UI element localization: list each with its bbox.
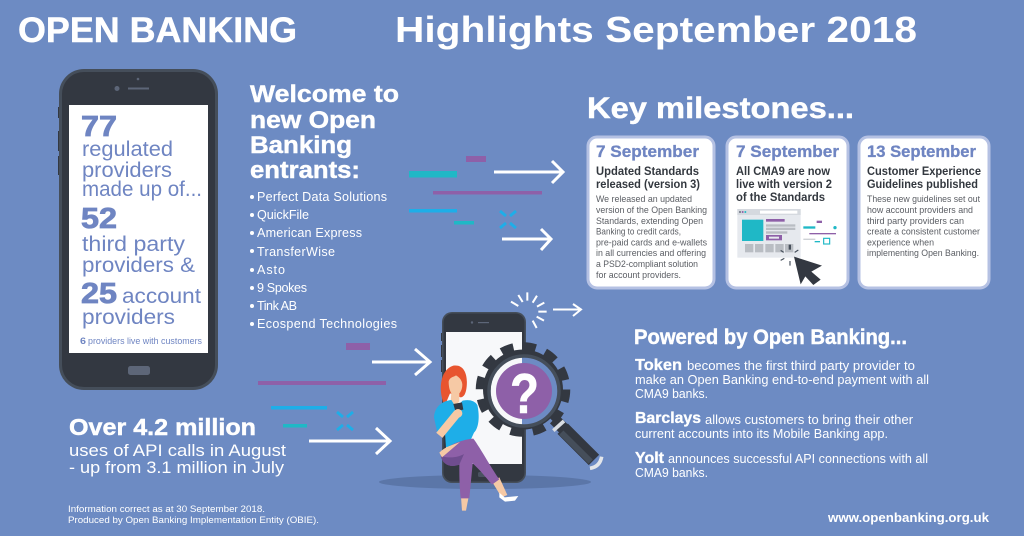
icon: browser window and cursor <box>737 209 837 285</box>
heading: key milestones: Key milestones... <box>587 92 854 125</box>
panel: card 13 September guidelines <box>859 137 989 288</box>
panel: phone with provider statistics: providers <box>82 158 172 182</box>
panel: card 7 September updated standards: released (version 3) <box>596 179 700 191</box>
panel: card 13 September guidelines: 13 September <box>867 142 976 161</box>
panel: phone with provider statistics: third party <box>82 232 185 256</box>
panel: phone with provider statistics: providers live with customers <box>88 336 202 347</box>
heading: new entrants: Welcome to <box>250 81 399 108</box>
text block: Token: becomes the first third party provider to <box>687 358 915 373</box>
arrow: to key milestones upper <box>494 161 563 183</box>
panel: card 7 September updated standards: Updated Standards <box>596 166 699 178</box>
panel: card 13 September guidelines: create a consistent customer <box>867 226 980 236</box>
heading: new entrants: Banking <box>250 132 352 159</box>
panel: card 7 September updated standards: version of the Open Banking <box>596 205 707 215</box>
footer: source note: Information correct as at 30 September 2018. <box>68 504 265 514</box>
heading: new entrants: new Open <box>250 107 376 134</box>
text block: Token: make an Open Banking end-to-end payment with all <box>635 372 929 387</box>
icon: burst rays <box>511 292 547 328</box>
list: new entrants: TransferWise <box>257 245 335 259</box>
panel: card 13 September guidelines: Customer Experience <box>867 166 981 178</box>
panel: card 7 September updated standards <box>588 137 714 288</box>
list: new entrants: 9 Spokes <box>257 281 307 295</box>
panel: card 13 September guidelines: Guidelines published <box>867 179 978 191</box>
text block: Token: CMA9 banks. <box>635 386 708 401</box>
icon: gear and magnifying glass with question mark: ? <box>510 362 539 426</box>
text block: Barclays: current accounts into its Mobile Banking app. <box>635 426 888 441</box>
text block: Barclays: Barclays <box>635 410 701 427</box>
heading: new entrants <box>250 81 399 184</box>
panel: phone with provider statistics: 52 <box>81 203 117 235</box>
stat: API calls: uses of API calls in August <box>69 442 286 460</box>
panel: card 7 September updated standards: Banking to credit cards, <box>596 226 681 236</box>
list: new entrants: Asto <box>257 263 285 277</box>
text block: Token: Token <box>635 357 682 374</box>
arrow: to key milestones lower <box>502 229 551 250</box>
illustration: phone, magnifier and woman <box>379 292 602 511</box>
text block: Barclays <box>635 410 914 441</box>
text block: Yolt <box>635 450 928 480</box>
text block: Yolt: Yolt <box>635 450 664 467</box>
panel: phone with provider statistics: providers & <box>82 253 195 277</box>
panel: card 7 September CMA9 live: of the Standards <box>736 192 825 204</box>
footer: source note: Produced by Open Banking Implementation Entity (OBIE). <box>68 515 319 525</box>
panel: card 7 September CMA9 live <box>727 137 848 288</box>
panel: card 13 September guidelines: how account providers and <box>867 205 973 215</box>
panel: card 13 September guidelines: implementing Open Banking. <box>867 248 979 258</box>
panel: card 7 September updated standards: in all currencies and offering <box>596 248 706 258</box>
title: Highlights September 2018: Highlights September 2018 <box>395 9 917 50</box>
list: new entrants: Perfect Data Solutions <box>257 190 387 204</box>
panel: card 7 September updated standards: for account providers. <box>596 270 681 280</box>
panel: card 7 September updated standards: Standards, extending Open <box>596 216 703 226</box>
panel: card 13 September guidelines: third party providers can <box>867 216 964 226</box>
decorative bars upper <box>409 156 542 228</box>
list: new entrants: Tink AB <box>257 299 297 313</box>
footer: source note <box>68 504 319 525</box>
arrow: from API statistic <box>309 428 390 454</box>
panel: phone with provider statistics: account <box>122 284 201 308</box>
panel: phone with provider statistics: providers <box>82 305 175 329</box>
stat: API calls: - up from 3.1 million in July <box>69 459 285 477</box>
title: Open Banking logotype: OPEN BANKING <box>18 11 297 50</box>
text block: Barclays: allows customers to bring their other <box>705 412 914 427</box>
panel: card 7 September updated standards: 7 September <box>596 142 699 161</box>
list: new entrants: Ecospend Technologies <box>257 317 397 331</box>
panel: card 7 September CMA9 live: live with version 2 <box>736 179 832 191</box>
heading: powered by open banking: Powered by Open Banking... <box>634 326 907 349</box>
panel: card 7 September CMA9 live: 7 September <box>736 142 839 161</box>
decorative bars lower <box>258 343 386 430</box>
icon: gear and magnifying glass with question mark <box>480 346 602 468</box>
panel: phone with provider statistics: regulated <box>82 137 173 161</box>
list: new entrants <box>250 190 397 331</box>
icon: central phone <box>441 312 526 483</box>
text block: Yolt: announces successful API connections with all <box>668 451 928 466</box>
arrow: small to powered by <box>553 304 581 316</box>
stat: API calls: Over 4.2 million <box>69 414 256 440</box>
panel: card 7 September updated standards: We released an updated <box>596 194 692 204</box>
panel: phone with provider statistics: made up of... <box>82 177 202 201</box>
heading: new entrants: entrants: <box>250 157 360 184</box>
panel: phone with provider statistics <box>58 69 218 390</box>
stat: API calls <box>69 414 286 477</box>
arrow: to central phone <box>372 349 430 375</box>
footer: website: www.openbanking.org.uk <box>827 510 990 525</box>
panel: card 7 September CMA9 live: All CMA9 are now <box>736 166 830 178</box>
list: new entrants: QuickFile <box>257 208 309 222</box>
icon: woman using a phone <box>434 365 518 511</box>
list: new entrants: American Express <box>257 226 362 240</box>
panel: card 7 September updated standards: a PSD2-compliant solution <box>596 259 698 269</box>
panel: phone with provider statistics: 77 <box>81 111 117 143</box>
panel: card 13 September guidelines: These new guidelines set out <box>867 194 980 204</box>
text block: Token <box>635 357 929 401</box>
panel: phone with provider statistics: 6 <box>80 336 86 347</box>
panel: phone with provider statistics: 25 <box>81 278 117 310</box>
panel: card 7 September updated standards: pre-paid cards and e-wallets <box>596 238 707 248</box>
text block: Yolt: CMA9 banks. <box>635 465 708 480</box>
panel: card 13 September guidelines: experience when <box>867 238 934 248</box>
